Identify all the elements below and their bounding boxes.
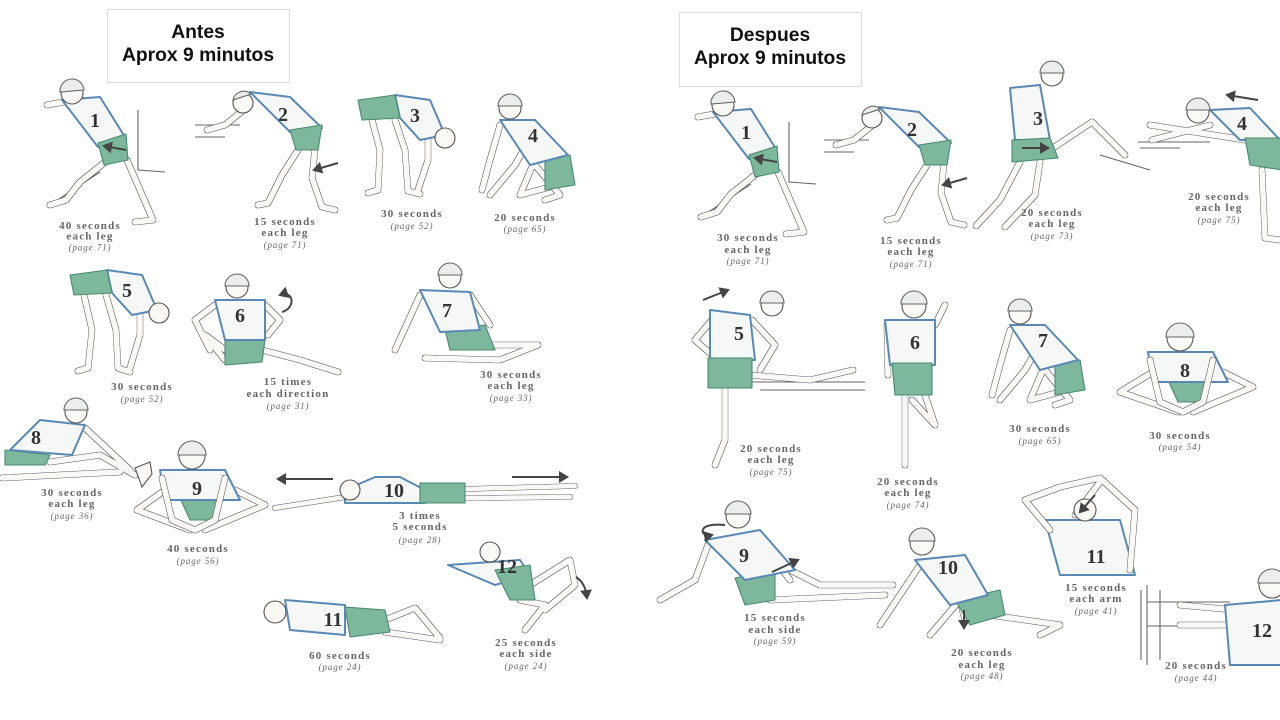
exercise Despues 4: 20 seconds: [1188, 191, 1250, 203]
title: Despues: [680, 12, 862, 86]
exercise Despues 3: 3: [1033, 108, 1043, 130]
exercise Despues 4: [1138, 95, 1280, 240]
exercise Antes 3: (page 52): [391, 221, 433, 231]
exercise Despues 5: (page 75): [750, 467, 792, 477]
exercise Despues 6: each leg: [884, 487, 932, 499]
exercise Antes 10: (page 28): [399, 535, 441, 545]
exercise Antes 7: 30 seconds: [480, 369, 542, 381]
exercise Antes 7: each leg: [487, 380, 535, 392]
title: Antes: Antes: [171, 22, 225, 43]
exercise Despues 11: 15 seconds: [1065, 582, 1127, 594]
exercise Despues 2: 15 seconds: [880, 235, 942, 247]
exercise Despues 6: (page 74): [887, 500, 929, 510]
exercise Antes 2: 15 seconds: [254, 216, 316, 228]
title: Despues: Aprox 9 minutos: [694, 48, 846, 69]
exercise Antes 4: (page 65): [504, 224, 546, 234]
exercise Despues 2: (page 71): [890, 259, 932, 269]
exercise Despues 12: (page 44): [1175, 673, 1217, 683]
exercise Despues 11: each arm: [1069, 593, 1123, 605]
exercise Despues 1: 1: [741, 122, 751, 144]
exercise Antes 6: (page 31): [267, 401, 309, 411]
exercise Despues 10: each leg: [958, 659, 1006, 671]
exercise Antes 3: 3: [410, 105, 420, 127]
exercise Despues 11: [1025, 478, 1135, 616]
exercise Despues 1: 30 seconds: [717, 232, 779, 244]
exercise Antes 11: (page 24): [319, 662, 361, 672]
exercise Antes 10: [275, 477, 575, 545]
exercise Antes 7: 7: [442, 300, 452, 322]
exercise Despues 6: 20 seconds: [877, 476, 939, 488]
exercise Antes 1: each leg: [66, 230, 114, 242]
exercise Despues 12: 12: [1252, 620, 1272, 642]
exercise Despues 5: [695, 290, 865, 477]
title: Antes: [108, 10, 290, 82]
exercise Antes 11: 60 seconds: [309, 650, 371, 662]
exercise Despues 11: (page 41): [1075, 606, 1117, 616]
exercise Despues 9: 9: [739, 545, 749, 567]
title: Antes: Aprox 9 minutos: [122, 45, 274, 66]
exercise Antes 12: (page 24): [505, 661, 547, 671]
exercise Despues 7: 30 seconds: [1009, 423, 1071, 435]
exercise Antes 3: 30 seconds: [381, 208, 443, 220]
exercise Antes 7: (page 33): [490, 393, 532, 403]
exercise Antes 5: (page 52): [121, 394, 163, 404]
exercise Antes 2: [195, 91, 338, 250]
exercise Antes 12: [448, 542, 587, 671]
exercise Despues 8: (page 54): [1159, 442, 1201, 452]
exercise Antes 10: 10: [384, 480, 404, 502]
exercise Antes 3: [358, 95, 455, 231]
exercise Despues 8: 8: [1180, 360, 1190, 382]
exercise Antes 6: [195, 274, 338, 411]
exercise Antes 1: 40 seconds: [59, 220, 121, 232]
exercise Antes 9: [137, 441, 265, 566]
exercise Despues 3: [976, 61, 1150, 241]
exercise Antes 12: 25 seconds: [495, 637, 557, 649]
exercise Despues 1: (page 71): [727, 256, 769, 266]
exercise Antes 4: 4: [528, 125, 538, 147]
exercise Antes 8: (page 36): [51, 511, 93, 521]
exercise Despues 9: each side: [748, 624, 802, 636]
exercise Despues 2: 2: [907, 119, 917, 141]
exercise Despues 10: 10: [938, 557, 958, 579]
exercise Despues 10: 20 seconds: [951, 647, 1013, 659]
exercise Despues 3: 20 seconds: [1021, 207, 1083, 219]
exercise Antes 9: (page 56): [177, 556, 219, 566]
exercise Despues 12: 20 seconds: [1165, 660, 1227, 672]
exercise Despues 4: each leg: [1195, 202, 1243, 214]
title: Despues: Despues: [730, 25, 810, 46]
exercise Despues 6: 6: [910, 332, 920, 354]
exercise Antes 8: 30 seconds: [41, 487, 103, 499]
exercise Despues 12: [1141, 569, 1280, 683]
exercise Antes 4: [482, 94, 575, 234]
exercise Antes 8: [2, 398, 152, 521]
exercise Despues 1: each leg: [724, 244, 772, 256]
exercise Antes 8: 8: [31, 427, 41, 449]
exercise Antes 10: 3 times: [399, 510, 441, 522]
exercise Despues 7: [992, 299, 1085, 446]
exercise Antes 11: [264, 600, 440, 672]
exercise Antes 2: 2: [278, 104, 288, 126]
exercise Antes 4: 20 seconds: [494, 212, 556, 224]
exercise Despues 4: (page 75): [1198, 215, 1240, 225]
exercise Antes 1: (page 71): [69, 242, 111, 252]
exercise Despues 8: 30 seconds: [1149, 430, 1211, 442]
exercise Antes 5: 30 seconds: [111, 381, 173, 393]
exercise Antes 11: 11: [324, 609, 342, 631]
exercise Antes 5: [70, 270, 173, 404]
exercise Despues 5: 20 seconds: [740, 443, 802, 455]
exercise Despues 5: each leg: [747, 454, 795, 466]
exercise Antes 6: 6: [235, 305, 245, 327]
exercise Antes 2: (page 71): [264, 240, 306, 250]
exercise Antes 8: each leg: [48, 498, 96, 510]
exercise Antes 6: each direction: [247, 388, 329, 400]
exercise Despues 5: 5: [734, 323, 744, 345]
exercise Despues 3: each leg: [1028, 218, 1076, 230]
exercise Antes 9: 9: [192, 478, 202, 500]
exercise Despues 10: [880, 528, 1060, 681]
exercise Despues 7: (page 65): [1019, 436, 1061, 446]
exercise Despues 10: (page 48): [961, 671, 1003, 681]
exercise Despues 2: [824, 106, 967, 269]
exercise Despues 11: 11: [1087, 546, 1105, 568]
exercise Antes 7: [395, 263, 542, 403]
exercise Antes 9: 40 seconds: [167, 543, 229, 555]
exercise Despues 4: 4: [1237, 113, 1247, 135]
exercise Antes 5: 5: [122, 280, 132, 302]
exercise Despues 3: (page 73): [1031, 231, 1073, 241]
exercise Antes 1: 1: [90, 110, 100, 132]
exercise Antes 1: [47, 79, 165, 252]
exercise Despues 8: [1120, 323, 1253, 452]
exercise Despues 9: (page 59): [754, 636, 796, 646]
exercise Despues 6: [877, 291, 945, 510]
exercise Antes 2: each leg: [261, 227, 309, 239]
exercise Despues 9: [660, 501, 893, 646]
exercise Despues 1: [698, 91, 816, 266]
exercise Antes 10: 5 seconds: [392, 521, 448, 533]
exercise Despues 2: each leg: [887, 246, 935, 258]
exercise Antes 12: 12: [497, 556, 517, 578]
exercise Antes 12: each side: [499, 648, 553, 660]
exercise Antes 6: 15 times: [264, 376, 312, 388]
exercise Despues 9: 15 seconds: [744, 612, 806, 624]
exercise Despues 7: 7: [1038, 330, 1048, 352]
